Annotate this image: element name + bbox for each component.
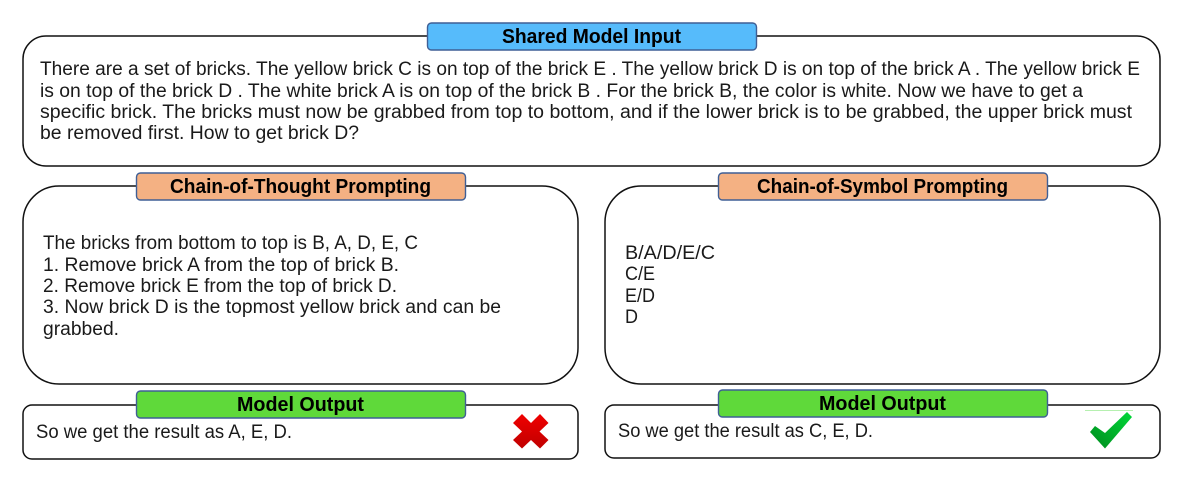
heading: model output left: Model Output	[237, 394, 364, 416]
icon: red cross	[513, 414, 548, 448]
panel: chain-of-symbol prompting	[605, 173, 1160, 384]
text block: chain-of-thought steps: 1. Remove brick A from the top of brick B.	[43, 255, 399, 276]
heading: chain-of-symbol prompting	[718, 173, 1048, 200]
heading: chain-of-symbol prompting: Chain-of-Symbol Prompting	[757, 176, 1008, 198]
heading: shared model input: Shared Model Input	[502, 26, 681, 48]
text block: chain-of-thought steps	[43, 233, 501, 340]
text block: chain-of-symbol steps: B/A/D/E/C	[625, 243, 715, 264]
heading: model output right	[718, 390, 1048, 417]
text: correct result: So we get the result as C, E, D.	[618, 421, 873, 442]
text block: chain-of-thought steps: grabbed.	[43, 319, 119, 340]
panel: shared model input	[23, 23, 1160, 166]
panel: chain-of-thought prompting	[23, 173, 578, 384]
panel: model output, chain-of-symbol	[605, 390, 1160, 458]
icon: green check mark	[1085, 410, 1133, 448]
text block: chain-of-symbol steps: E/D	[625, 286, 655, 307]
text block: chain-of-thought steps: The bricks from bottom to top is B, A, D, E, C	[43, 233, 418, 254]
heading: model output left	[136, 391, 466, 418]
panel: model output, chain-of-thought	[23, 391, 578, 459]
text: wrong result: So we get the result as A, E, D.	[36, 422, 292, 443]
text block: chain-of-thought steps: 3. Now brick D is the topmost yellow brick and can be	[43, 297, 501, 318]
heading: shared model input	[428, 23, 756, 50]
heading: model output right: Model Output	[819, 393, 946, 415]
text block: chain-of-symbol steps	[625, 243, 715, 328]
text block: shared input question	[40, 59, 1140, 144]
text block: shared input question: There are a set of bricks. The yellow brick C is on top of the brick E . The yellow brick D is on top of the brick A . The yellow brick E	[40, 59, 1140, 80]
text block: shared input question: specific brick. The bricks must now be grabbed from top to bottom, and if the lower brick is to be grabbed, the upper brick must	[40, 102, 1133, 123]
text block: shared input question: is on top of the brick D . The white brick A is on top of the brick B . For the brick B, the color is white. Now we have to get a	[40, 81, 1083, 102]
heading: chain-of-thought prompting: Chain-of-Thought Prompting	[170, 176, 431, 198]
heading: chain-of-thought prompting	[136, 173, 466, 200]
text block: chain-of-symbol steps: D	[625, 307, 638, 328]
text block: chain-of-symbol steps: C/E	[625, 264, 655, 285]
text block: shared input question: be removed first. How to get brick D?	[40, 123, 359, 144]
text block: chain-of-thought steps: 2. Remove brick E from the top of brick D.	[43, 276, 397, 297]
